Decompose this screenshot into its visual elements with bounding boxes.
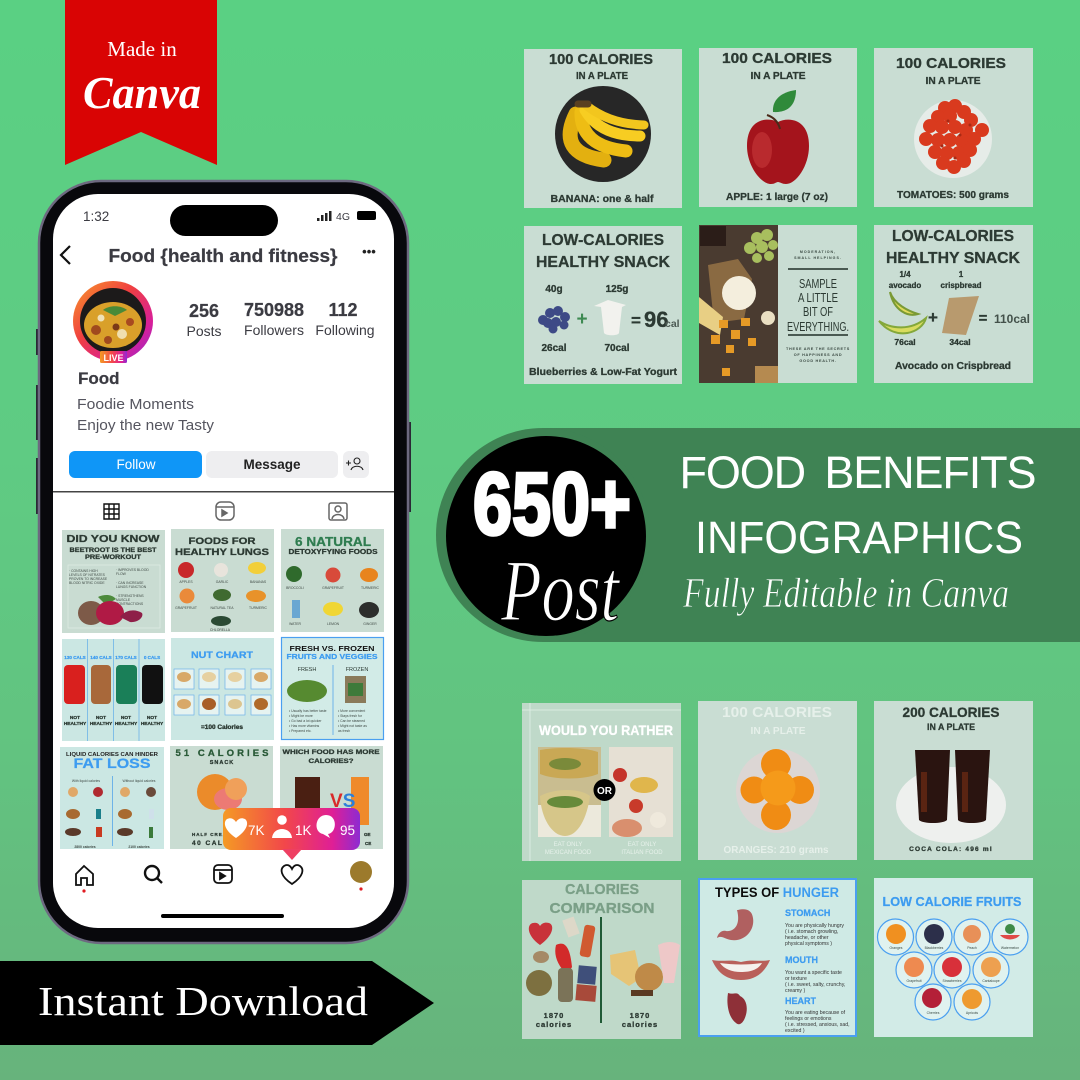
- post: beetroot: BEETROOT IS THE BEST: [70, 547, 157, 554]
- post: beetroot: · IMPROVES BLOOD: [116, 568, 149, 572]
- post: detoxifying foods: TURMERIC: [361, 586, 379, 590]
- card: avocado snack: +: [928, 308, 938, 327]
- post: soda cans: NOT: [70, 715, 80, 721]
- card: would you rather: WOULD YOU RATHER: [539, 722, 673, 738]
- post: healthy lungs: NATURAL TEA: [211, 606, 234, 610]
- stat: following: 112: [328, 300, 358, 320]
- fruit labels: Apricots: [966, 1011, 978, 1015]
- post: soda cans: 130 CALS: [64, 655, 86, 660]
- post: which food has more calories: VS: [330, 791, 355, 812]
- card: would you rather: EAT ONLY: [554, 842, 582, 848]
- post: which food has more calories: WHICH FOOD HAS MORE: [282, 749, 380, 756]
- nav icon: search: [145, 866, 162, 883]
- card: sample a little bit: BIT OF: [803, 304, 833, 319]
- stat: posts: 256: [189, 301, 219, 321]
- card: avocado snack: 1/4: [899, 270, 911, 279]
- post: soda cans: NOT: [121, 715, 131, 721]
- phone: [36, 181, 411, 943]
- card: would you rather: MEXICAN FOOD: [545, 850, 592, 856]
- tab icon: reels: [216, 502, 234, 520]
- icon: tomatoes on plate: [914, 99, 992, 178]
- card: 100 calories tomatoes: TOMATOES: 500 grams: [897, 189, 1009, 201]
- post: nut chart: =100 Calories: [201, 725, 244, 731]
- status icons: [317, 211, 376, 223]
- card: avocado snack: Avocado on Crispbread: [895, 361, 1011, 372]
- post: soda cans: NOT: [147, 715, 157, 721]
- card: types of hunger: ( i.e. sweet, salty, crunchy,: [785, 982, 845, 988]
- fruit images: [886, 924, 1020, 1009]
- banner title line 1: FOOD BENEFITS: [680, 447, 1036, 498]
- card: types of hunger: You are physically hungry: [785, 923, 844, 929]
- icon: follower: [272, 815, 292, 838]
- post: 51 calories: 51 CALORIES: [176, 748, 268, 759]
- icon: like: [225, 818, 247, 838]
- post: healthy lungs: TURMERIC: [249, 606, 267, 610]
- post: fresh vs frozen: • Has more vitamins: [289, 724, 320, 728]
- stat: followers: Followers: [244, 322, 304, 338]
- post: soda cans: HEALTHY: [115, 721, 138, 727]
- card: 100 calories banana: 100 CALORIES: [549, 52, 653, 68]
- card: types of hunger: [699, 879, 856, 1036]
- post: fresh vs frozen: FRESH: [298, 667, 316, 673]
- post: beetroot: DID YOU KNOW: [66, 534, 160, 545]
- card: 100 calories tomatoes: [874, 48, 1033, 207]
- card: avocado snack: [874, 225, 1033, 383]
- home indicator: [161, 914, 284, 918]
- fruit circles: [878, 919, 1028, 1020]
- card: sample a little bit: GOOD HEALTH.: [799, 359, 837, 363]
- card: 100 calories oranges: 100 CALORIES: [722, 705, 832, 721]
- fruit labels: Cantaloupe: [982, 979, 1000, 983]
- card: types of hunger: headache, or other: [785, 935, 829, 941]
- badge: 650+ post: Post: [500, 543, 621, 640]
- profile bio: [77, 397, 215, 434]
- icon: heart organ: [727, 993, 747, 1024]
- post: beetroot: MUSCLE: [116, 598, 131, 602]
- avatar: LIVE: [103, 353, 124, 363]
- card: types of hunger: MOUTH: [785, 955, 818, 965]
- nav dots: [82, 887, 363, 893]
- post: fat loss: FAT LOSS: [74, 755, 150, 771]
- icon: crispbread: [942, 296, 979, 335]
- fruit labels: Grapefruit: [906, 979, 922, 983]
- post: fresh vs frozen: • Prepared etc.: [289, 729, 312, 733]
- notification bubble: [223, 808, 360, 860]
- card: sample a little bit: MODERATION,: [800, 250, 836, 254]
- post: nut chart: NUT CHART: [191, 650, 253, 661]
- post: fresh vs frozen: • More convenient: [338, 709, 365, 713]
- card: types of hunger: HEART: [785, 996, 817, 1006]
- card: blueberries snack: [524, 226, 682, 384]
- post: detoxifying foods: BROCCOLI: [286, 586, 304, 590]
- card: sample a little bit: EVERYTHING.: [787, 319, 849, 334]
- button: follow: [69, 451, 202, 478]
- card: blueberries snack: HEALTHY SNACK: [536, 254, 670, 271]
- card: calories comparison: calories: [622, 1020, 658, 1029]
- banner subtitle script: Fully Editable in Canva: [682, 571, 1009, 617]
- post: fat loss: Without liquid calories: [123, 779, 156, 783]
- card: avocado snack: avocado: [889, 281, 921, 290]
- card: blueberries snack: 70cal: [604, 343, 630, 354]
- tab icon: grid: [104, 504, 119, 519]
- fruit labels: Watermelon: [1001, 946, 1019, 950]
- post: fat loss: With liquid calories: [72, 779, 100, 783]
- card: types of hunger: feelings or emotions: [785, 1016, 832, 1022]
- post: detoxifying foods: 6 NATURAL: [295, 534, 371, 549]
- dynamic island: [170, 205, 278, 236]
- fruit labels: Strawberries: [942, 979, 962, 983]
- card: 100 calories banana: [524, 49, 682, 208]
- post: detoxifying foods: [281, 529, 384, 632]
- card: blueberries snack: cal: [665, 318, 680, 330]
- post: which food has more calories: [280, 746, 383, 849]
- card: blueberries snack: 96: [644, 307, 668, 332]
- icon: mouth: [712, 960, 770, 980]
- card: types of hunger: ( i.e. stomach growling,: [785, 929, 838, 935]
- stat: posts: [186, 301, 222, 339]
- card: calories comparison: [522, 880, 681, 1039]
- post: healthy lungs: GARLIC: [216, 580, 229, 584]
- card: calories comparison: calories: [536, 1020, 572, 1029]
- ribbon text: made in: Made in: [107, 37, 177, 61]
- banner: instant download: [0, 961, 434, 1045]
- post: which food has more calories: CALORIES?: [308, 758, 354, 765]
- photo: cheese board: [699, 225, 778, 383]
- badge: 650+ post: [446, 436, 646, 640]
- card: low calorie fruits: LOW CALORIE FRUITS: [882, 895, 1022, 909]
- notification bubble: 1K: [295, 823, 312, 838]
- card: blueberries snack: 26cal: [541, 343, 567, 354]
- banner title line 2: INFOGRAPHICS: [695, 512, 1023, 563]
- post: fresh vs frozen: • Stays fresh for: [338, 714, 363, 718]
- post: beetroot: [62, 530, 165, 633]
- avatar: [73, 281, 153, 363]
- card: 100 calories banana: IN A PLATE: [576, 71, 628, 82]
- card: 200 calories coca cola: IN A PLATE: [927, 722, 975, 733]
- card: 200 calories coca cola: 200 CALORIES: [902, 704, 1000, 720]
- card: 100 calories oranges: IN A PLATE: [750, 726, 806, 737]
- card: 100 calories oranges: [698, 701, 857, 860]
- icon: yogurt cup: [594, 300, 626, 335]
- card: 100 calories tomatoes: 100 CALORIES: [896, 56, 1006, 72]
- card: avocado snack: 34cal: [949, 337, 971, 347]
- ribbon: made in canva: [65, 0, 217, 165]
- card: sample a little bit: SAMPLE: [799, 276, 837, 291]
- post: soda cans: [62, 639, 165, 741]
- post: detoxifying foods: DETOXYFYING FOODS: [288, 549, 378, 556]
- post: soda cans: NOT: [96, 715, 106, 721]
- status icons: 4G: [336, 211, 350, 223]
- food: healthy side: [526, 916, 597, 1002]
- fruit labels: Cherries: [927, 1011, 940, 1015]
- nav icon: home: [76, 866, 93, 885]
- icon: stomach: [717, 909, 753, 940]
- card: types of hunger: excited ): [785, 1028, 805, 1034]
- card: types of hunger: STOMACH: [785, 908, 830, 918]
- food: junk side: [610, 942, 680, 996]
- post: fresh vs frozen: • Might not taste as: [338, 724, 367, 728]
- card: avocado snack: 76cal: [894, 337, 916, 347]
- icon: apple: [747, 90, 809, 184]
- card: avocado snack: HEALTHY SNACK: [886, 250, 1020, 267]
- icon: beetroots: [78, 595, 142, 625]
- card: 100 calories apple: IN A PLATE: [750, 71, 806, 82]
- post: healthy lungs: [171, 529, 274, 632]
- post: fat loss: 2800 calories: [74, 845, 96, 849]
- post: 51 calories: [170, 746, 273, 849]
- post: 51 calories: HALF CREA: [192, 832, 227, 837]
- card: blueberries snack: 125g: [606, 284, 628, 295]
- card: 100 calories apple: [699, 48, 857, 207]
- card: calories comparison: COMPARISON: [550, 900, 654, 917]
- card: types of hunger: You are eating because of: [785, 1010, 846, 1016]
- post: which food has more calories: GE: [364, 832, 371, 837]
- card: sample a little bit: OF HAPPINESS AND: [794, 353, 842, 357]
- post: fresh vs frozen: • Usually has better taste: [289, 709, 327, 713]
- post: beetroot: CONTRACTIONS: [116, 602, 144, 606]
- card: avocado snack: 1: [959, 270, 964, 279]
- banner: food benefits: [436, 428, 1080, 642]
- notification bubble: 7K: [248, 823, 265, 838]
- post: healthy lungs: FOODS FOR: [188, 536, 256, 547]
- post: healthy lungs: GRAPEFRUIT: [175, 606, 197, 610]
- card: types of hunger: You want a specific taste: [785, 970, 842, 976]
- stat: posts: Posts: [186, 323, 222, 339]
- card: would you rather: [522, 703, 681, 861]
- card: blueberries snack: =: [631, 311, 641, 330]
- post: fresh vs frozen: [282, 638, 384, 740]
- card: 100 calories apple: APPLE: 1 large (7 oz): [726, 191, 828, 203]
- post: fresh vs frozen: FRESH VS. FROZEN: [290, 644, 374, 653]
- card: types of hunger: physical symptoms ): [785, 941, 832, 947]
- card: 100 calories banana: BANANA: one & half: [550, 193, 654, 205]
- card: avocado snack: 110cal: [994, 314, 1030, 326]
- button: add friend: [343, 451, 369, 478]
- button: message: Message: [243, 457, 301, 472]
- card: types of hunger: ( i.e. stressed, anxious, sad,: [785, 1022, 850, 1028]
- profile bio: Enjoy the new Tasty: [77, 418, 215, 434]
- status time: 1:32: [83, 209, 109, 224]
- card: avocado snack: crispbread: [941, 281, 982, 290]
- badge: or: OR: [597, 786, 613, 797]
- post: healthy lungs: HEALTHY LUNGS: [175, 547, 269, 558]
- post: healthy lungs: CHLORELLA: [210, 628, 231, 632]
- card: low calorie fruits: [874, 878, 1033, 1037]
- card: sample a little bit: A LITTLE: [798, 290, 838, 305]
- banner: instant download: Instant Download: [38, 978, 368, 1024]
- card: 200 calories coca cola: [874, 701, 1033, 860]
- post: fresh vs frozen: FRUITS AND VEGGIES: [286, 652, 378, 661]
- more dots: •••: [362, 244, 376, 259]
- post: beetroot: LUNGS FUNCTION: [116, 585, 147, 589]
- card: types of hunger: or texture: [785, 976, 807, 982]
- tab icon: tagged: [329, 503, 347, 520]
- profile bio: Foodie Moments: [77, 397, 194, 413]
- post: beetroot: PRE-WORKOUT: [85, 554, 141, 561]
- badge: 650+ post: 650+: [473, 454, 631, 553]
- card: would you rather: EAT ONLY: [628, 842, 656, 848]
- stat: followers: [244, 300, 304, 338]
- card: sample a little bit: THESE ARE THE SECRETS: [786, 347, 850, 351]
- post: detoxifying foods: GINGER: [363, 622, 377, 626]
- icon: avocado slices: [879, 292, 926, 333]
- badge: or: [594, 779, 616, 801]
- post: fresh vs frozen: • Go bad a lot quicker: [289, 719, 322, 723]
- post: beetroot: LEVELS OF NITRATES: [69, 573, 106, 577]
- post: fat loss: 2100 calories: [128, 845, 150, 849]
- fruit labels: Blackberries: [925, 946, 944, 950]
- button: message: [206, 451, 338, 478]
- post: soda cans: HEALTHY: [64, 721, 87, 727]
- post: nut chart: [171, 638, 274, 740]
- post: soda cans: 0 CALS: [144, 655, 160, 660]
- post: fresh vs frozen: • Might be more: [289, 714, 313, 718]
- back arrow: [61, 246, 70, 264]
- post: soda cans: HEALTHY: [90, 721, 113, 727]
- card: sample a little bit: SMALL HELPINGS.: [794, 256, 842, 260]
- card: blueberries snack: +: [576, 309, 588, 330]
- post: fresh vs frozen: FROZEN: [346, 667, 368, 673]
- post: soda cans: HEALTHY: [141, 721, 164, 727]
- nav icon: heart: [282, 865, 302, 884]
- post: detoxifying foods: WATER: [289, 622, 301, 626]
- post: detoxifying foods: GRAPEFRUIT: [322, 586, 344, 590]
- card: 100 calories tomatoes: IN A PLATE: [926, 76, 981, 87]
- post: 51 calories: SNACK: [210, 760, 234, 766]
- icon: cola glasses on plate: [896, 750, 1006, 843]
- card: calories comparison: 1870: [630, 1011, 650, 1020]
- card: avocado snack: =: [979, 310, 988, 327]
- icon: bananas on dark plate: [555, 86, 651, 182]
- post: beetroot: · CAN INCREASE: [116, 581, 144, 585]
- icon: oranges on plate: [736, 749, 820, 833]
- card: calories comparison: 1870: [544, 1011, 564, 1020]
- fruit labels: Peach: [967, 946, 977, 950]
- phone side buttons: [36, 329, 411, 514]
- post: beetroot: BLOOD NITRIC OXIDE: [69, 581, 105, 585]
- post: soda cans: 140 CALS: [90, 655, 112, 660]
- ribbon text: canva: Canva: [83, 67, 201, 118]
- post: healthy lungs: APPLES: [179, 580, 193, 584]
- stat: followers: 750988: [244, 300, 304, 320]
- photo: mexican food: [538, 747, 601, 837]
- post: fresh vs frozen: as fresh: [338, 729, 350, 733]
- icon: blueberries: [538, 306, 570, 334]
- card: sample a little bit: [699, 225, 857, 383]
- post: detoxifying foods: LEMON: [327, 622, 340, 626]
- card: blueberries snack: LOW-CALORIES: [542, 232, 664, 249]
- profile name: Food: [78, 369, 120, 388]
- post: beetroot: PROVEN TO INCREASE: [69, 577, 108, 581]
- post: fat loss: [60, 747, 164, 849]
- icon: comment: [317, 815, 335, 838]
- post: beetroot: FLOW: [116, 572, 127, 576]
- stat: following: [315, 300, 375, 338]
- card: calories comparison: CALORIES: [565, 881, 639, 898]
- post: which food has more calories: CE: [365, 841, 371, 846]
- nav icon: reels: [214, 865, 232, 883]
- card: types of hunger: TYPES OF HUNGER: [715, 885, 839, 900]
- photo: italian food: [609, 747, 673, 837]
- post: healthy lungs: BANANAS: [250, 580, 267, 584]
- post: beetroot: · CONTAINS HIGH: [69, 569, 98, 573]
- notification bubble: 95: [340, 823, 355, 838]
- post: 51 calories: 40 CAL: [192, 840, 223, 847]
- card: blueberries snack: 40g: [545, 284, 563, 295]
- card: would you rather: ITALIAN FOOD: [621, 850, 663, 856]
- card: types of hunger: creamy ): [785, 988, 805, 994]
- stat: following: Following: [315, 322, 375, 338]
- button: follow: Follow: [116, 457, 156, 472]
- profile title: Food {health and fitness}: [108, 246, 338, 266]
- card: blueberries snack: Blueberries & Low-Fat Yogurt: [529, 367, 678, 378]
- nav avatar: [350, 861, 372, 883]
- post: fresh vs frozen: • Can be steamed: [338, 719, 365, 723]
- card: 100 calories oranges: ORANGES: 210 grams: [724, 845, 829, 856]
- fruit labels: Oranges: [889, 946, 903, 950]
- post: fat loss: LIQUID CALORIES CAN HINDER: [66, 752, 158, 758]
- card: 200 calories coca cola: COCA COLA: 496 ml: [909, 846, 993, 853]
- post: beetroot: · STRENGTHENS: [116, 594, 144, 598]
- card: avocado snack: LOW-CALORIES: [892, 228, 1014, 245]
- fruit labels: [889, 946, 1019, 1015]
- post: soda cans: 170 CALS: [115, 655, 137, 660]
- card: 100 calories apple: 100 CALORIES: [722, 51, 832, 67]
